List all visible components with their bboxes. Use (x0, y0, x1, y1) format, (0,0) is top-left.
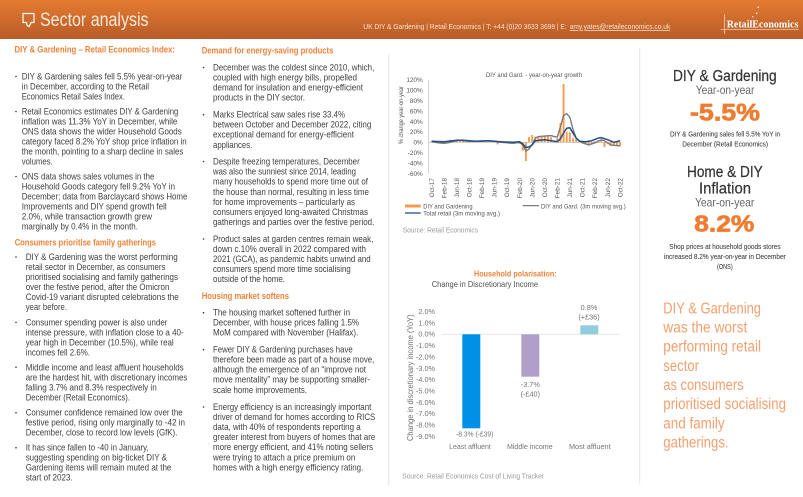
y axis labels: -2.0% (416, 352, 436, 361)
y axis labels: 60% (410, 108, 423, 115)
text block: consumer bullets (15, 252, 188, 483)
stat: DIY and Gardening: -5.5% (690, 100, 760, 127)
text block: consumer bullets: falling 3.7% and 8.3% respectively in (26, 382, 157, 392)
bar value labels: -3.7% (521, 380, 540, 389)
text block: housing bullets: greater interest from buyers of homes that are (213, 432, 375, 442)
text block: energy-saving bullets: products in the DIY sector. (213, 93, 305, 103)
stat: Home and DIY inflation: Shop prices at household goods stores (669, 242, 781, 251)
text block: energy-saving bullets: exceptional demand for energy-efficient (213, 130, 354, 140)
text block: energy-saving bullets: Despite freezing temperatures, December (213, 156, 360, 166)
text block: energy-saving bullets: coupled with high energy bills, propelled (213, 73, 357, 83)
bar value labels: 0.8% (581, 303, 598, 312)
bar value labels: (+£36) (578, 313, 600, 322)
stat: Home and DIY inflation (664, 164, 786, 271)
y axis labels (416, 307, 436, 441)
logo: Retail Economics: RetailEconomics (727, 20, 799, 30)
y axis labels: -8.0% (416, 421, 436, 430)
chart title: DIY and Gard. - year-on-year growth (486, 72, 582, 79)
text block: housing bullets: data, with 40% of respondents reporting a (213, 422, 361, 432)
x axis labels: Feb-18 (441, 178, 448, 198)
callout: worst performing sector: sector (663, 358, 699, 375)
text block: energy-saving bullets: 2021 (GCA), as pandemic habits unwind and (213, 254, 371, 264)
icon: presentation board (23, 14, 34, 27)
callout: worst performing sector (662, 300, 786, 452)
text block: energy-saving bullets: Product sales at garden centres remain weak, (213, 234, 373, 244)
chart source: Source: Retail Economics (403, 225, 478, 234)
stat: Home and DIY inflation: Year-on-year (695, 196, 754, 210)
chart source: Source: Retail Economics Cost of Living Tracker (402, 472, 545, 481)
text block: energy-saving bullets: down c.10% overall in 2022 compared with (213, 244, 366, 254)
heading: housing market softens: Housing market softens (202, 291, 289, 301)
text block: consumer bullets: Covid-19 variant disrupted celebrations the (26, 292, 179, 302)
callout: worst performing sector: gatherings. (663, 435, 729, 452)
text block: index bullets: inflation was 11.3% YoY in December, while (22, 116, 177, 126)
stat: DIY and Gardening: December (Retail Economics) (682, 140, 768, 149)
chart legend (405, 203, 626, 217)
x axis labels: Feb-19 (479, 178, 486, 198)
stat: Home and DIY inflation: (ONS) (717, 262, 733, 271)
text block: index bullets: 2.0%, while transaction growth grew (22, 212, 152, 222)
x axis labels: Jun-21 (567, 178, 574, 198)
callout: worst performing sector: performing retail (663, 338, 761, 356)
y axis labels: -60% (408, 171, 423, 178)
text block: housing bullets: driver of demand for homes according to RICS (213, 412, 375, 422)
text block: housing bullets: more energy efficient, and 41% noting sellers (213, 442, 373, 452)
y axis labels: -3.0% (416, 364, 436, 373)
text block: consumer bullets: festive period, rising only marginally to -42 in (26, 418, 185, 428)
text block: consumer bullets: prioritised socialising and family gatherings (26, 272, 178, 282)
text block: energy-saving bullets: consumers spend more time socialising (213, 264, 351, 274)
x axis labels: Feb-22 (592, 178, 599, 198)
title: Sector analysis (40, 10, 148, 31)
text block: index bullets: Improvements and DIY spend growth fell (22, 202, 167, 212)
text block: consumer bullets: December (Retail Economics). (26, 392, 130, 402)
y axis labels: 1.0% (418, 318, 436, 327)
text block: index bullets: in December, according to the Retail (22, 81, 149, 91)
x axis labels (429, 178, 624, 198)
text block: consumer bullets: over the festive period, after the Omicron (26, 282, 169, 292)
text block: consumer bullets: year high in December (10.5%), while real (26, 337, 174, 347)
text block: energy-saving bullets: for home improvements – particularly as (213, 197, 355, 207)
y axis labels: -1.0% (416, 341, 436, 350)
text block: index bullets: category faced 8.2% YoY shop price inflation in (22, 137, 187, 147)
x axis labels: Jun-18 (454, 178, 461, 198)
x axis labels: Jun-19 (492, 178, 499, 198)
y axis labels: -9.0% (416, 432, 436, 441)
text block: housing bullets: Energy efficiency is an increasingly important (213, 402, 372, 412)
text block: index bullets: December; data from Barclaycard shows Home (22, 192, 187, 202)
text block: energy-saving bullets (203, 62, 374, 284)
series plot (432, 84, 620, 161)
text block: index bullets: ONS data shows the wider Household Goods (22, 126, 182, 136)
callout: worst performing sector: was the worst (662, 320, 748, 336)
y axis labels: -40% (408, 160, 423, 167)
text block: index bullets: ONS data shows sales volumes in the (22, 172, 154, 182)
stat: Home and DIY inflation: Inflation (699, 180, 751, 197)
x axis labels: Oct-21 (580, 178, 587, 197)
text block: consumer bullets: retail sector in December, as consumers (26, 262, 166, 272)
text block: housing bullets: were trying to attach a price premium on (212, 452, 355, 462)
text block: index bullets: Household Goods category fell 9.2% YoY in (22, 182, 175, 192)
text block: consumer bullets: are the hardest hit, with discretionary incomes (26, 372, 188, 382)
chart subtitle: Change in Discretionary Income (432, 279, 538, 289)
stat: DIY and Gardening: DIY & Gardening (673, 68, 777, 85)
text block: energy-saving bullets: demand for insulation and energy-efficient (213, 83, 363, 93)
y axis labels: -5.0% (416, 386, 436, 396)
bar: most affluent (580, 325, 598, 334)
y axis title: % change year-on-year (398, 85, 405, 144)
heading: DIY and Gardening index: DIY & Gardening – Retail Economics Index: (14, 44, 175, 54)
callout: worst performing sector: and family (663, 415, 725, 432)
x axis labels: Oct-20 (542, 178, 549, 197)
stat: Home and DIY inflation: increased 8.2% year-on-year in December (664, 252, 786, 261)
text block: energy-saving bullets: gatherings and parties over the festive period. (213, 217, 374, 227)
text block: energy-saving bullets: December was the coldest since 2010, which, (213, 62, 374, 72)
text block: energy-saving bullets: between October and December 2022, citing (213, 120, 371, 130)
callout: worst performing sector: prioritised socialising (663, 396, 786, 413)
y axis labels: 120% (406, 77, 423, 84)
contact line: UK DIY & Gardening | Retail Economics | T: +44 (0)20 3633 3698 | E: (363, 22, 567, 31)
text block: consumer bullets: incomes fell 2.6%. (26, 347, 90, 357)
text block: consumer bullets: December, close to record low levels (GfK). (26, 428, 177, 438)
category labels: Least affluent (449, 442, 491, 451)
chart legend: DIY and Gardening (423, 203, 473, 210)
bar value labels (456, 303, 600, 438)
category labels: Most affluent (569, 442, 611, 451)
bar: middle income (521, 334, 539, 377)
y axis labels: -20% (408, 150, 423, 157)
heading: demand for energy-saving products: Demand for energy-saving products (202, 45, 333, 55)
header banner (0, 0, 803, 39)
text block: index bullets: Retail Economics estimates DIY & Gardening (22, 106, 178, 116)
stat: DIY and Gardening (670, 68, 780, 149)
chart legend: Total retail (3m moving avg.) (423, 210, 500, 217)
bar: least affluent (462, 334, 480, 428)
text block: housing bullets: MoM compared with November (Halifax). (213, 328, 358, 338)
y axis labels: 20% (410, 129, 423, 136)
callout: worst performing sector: DIY & Gardening (663, 300, 761, 318)
y axis labels: -7.0% (416, 409, 436, 418)
text block: consumer bullets: Consumer spending power is also under (26, 317, 167, 327)
contact line: amy.yates@retaileconomics.co.uk (570, 22, 671, 31)
text block: consumer bullets: Consumer confidence remained low over the (26, 408, 183, 418)
text block: housing bullets: The housing market softened further in (213, 308, 350, 318)
text block: consumer bullets: DIY & Gardening was the worst performing (26, 252, 178, 262)
chart legend: DIY and Gard. (3m moving avg.) (541, 203, 626, 210)
bar value labels: (-£40) (521, 389, 540, 398)
text block: consumer bullets: It has since fallen to -40 in January, (26, 443, 149, 453)
logo: Retail Economics (721, 6, 799, 34)
y axis labels (406, 77, 423, 178)
text block: energy-saving bullets: appliances. (213, 140, 252, 150)
chart heading: Household polarisation: (474, 269, 557, 279)
line: total retail 3m average (432, 128, 620, 148)
text block: housing bullets (203, 308, 375, 473)
category labels: Middle income (507, 442, 553, 451)
x axis labels: Oct-19 (504, 178, 511, 197)
callout: worst performing sector: as consumers (663, 377, 744, 394)
text block: energy-saving bullets: Marks Electrical saw sales rise 33.4% (213, 110, 345, 120)
chart: DIY and Gardening year-on-year growth (398, 72, 626, 234)
text block: index bullets: volumes. (22, 157, 53, 167)
y axis labels: 100% (406, 88, 423, 95)
text block: consumer bullets: year before. (26, 302, 67, 312)
text block: energy-saving bullets: the house than normal, resulting in less time (213, 187, 369, 197)
text block: housing bullets: Fewer DIY & Gardening purchases have (213, 345, 353, 355)
heading: consumers prioritise: Consumers prioritise family gatherings (15, 237, 156, 247)
text block: index bullets: DIY & Gardening sales fell 5.5% year-on-year (22, 71, 182, 81)
text block: housing bullets: homes with a high energy efficiency rating. (213, 463, 363, 473)
x axis labels: Jun-22 (605, 178, 612, 198)
bars: DIY and Gardening (432, 84, 620, 161)
text block: housing bullets: scale home improvements. (213, 385, 307, 395)
chart: change in discretionary income (402, 269, 619, 481)
text block: housing bullets: December, with house prices falling 1.5% (213, 318, 359, 328)
text block: consumer bullets: Gardening items will remain muted at the (26, 463, 171, 473)
y axis labels: -6.0% (416, 398, 436, 407)
bar value labels: -8.3% (-£39) (456, 429, 493, 438)
text block: consumer bullets: intense pressure, with inflation close to a 40- (26, 327, 184, 337)
text block: index bullets: marginally by 0.4% in the month. (22, 222, 138, 232)
x axis labels: Oct-17 (429, 178, 436, 197)
y axis labels: 0% (413, 140, 423, 147)
text block: index bullets (15, 71, 187, 232)
x axis labels: Oct-22 (617, 178, 624, 197)
y axis labels: 2.0% (418, 307, 436, 316)
x axis labels: Feb-21 (554, 178, 562, 198)
text block: index bullets: the month, pointing to a sharp decline in sales (22, 147, 184, 157)
y axis labels: -4.0% (416, 375, 436, 384)
text block: housing bullets: therefore been made as part of a house move, (213, 355, 374, 365)
stat: Home and DIY inflation: 8.2% (694, 211, 754, 237)
y axis labels: 0.0% (418, 330, 436, 339)
text block: housing bullets: although the emergence of an “improve not (213, 365, 366, 375)
text block: energy-saving bullets: consumers enjoyed long-awaited Christmas (213, 207, 368, 217)
text block: consumer bullets: suggesting spending on big-ticket DIY & (26, 453, 168, 463)
x axis labels: Oct-18 (466, 178, 474, 197)
text block: consumer bullets: start of 2023. (26, 473, 73, 483)
x axis labels: Feb-20 (517, 178, 524, 198)
x axis labels: Jun-20 (529, 178, 536, 198)
text block: consumer bullets: Middle income and least affluent households (26, 362, 184, 372)
text block: energy-saving bullets: many households to spend more time out of (213, 177, 368, 187)
stat: DIY and Gardening: DIY & Gardening sales fell 5.5% YoY in (670, 129, 780, 138)
stat: DIY and Gardening: Year-on-year (696, 83, 754, 97)
text block: housing bullets: move mentality” may be supporting smaller- (213, 375, 370, 385)
category labels (449, 442, 611, 451)
text block: index bullets: Economics Retail Sales Index. (22, 91, 125, 101)
line: DIY and Gardening 3m average (432, 114, 620, 151)
stat: Home and DIY inflation: Home & DIY (687, 164, 763, 181)
y axis labels: 40% (410, 119, 423, 126)
y axis title: Change in discretionary income (YoY) (406, 314, 415, 441)
y axis labels: 80% (410, 98, 423, 105)
text block: energy-saving bullets: was also the sunniest since 2014, leading (212, 167, 356, 177)
text block: energy-saving bullets: outside of the home. (213, 274, 285, 284)
